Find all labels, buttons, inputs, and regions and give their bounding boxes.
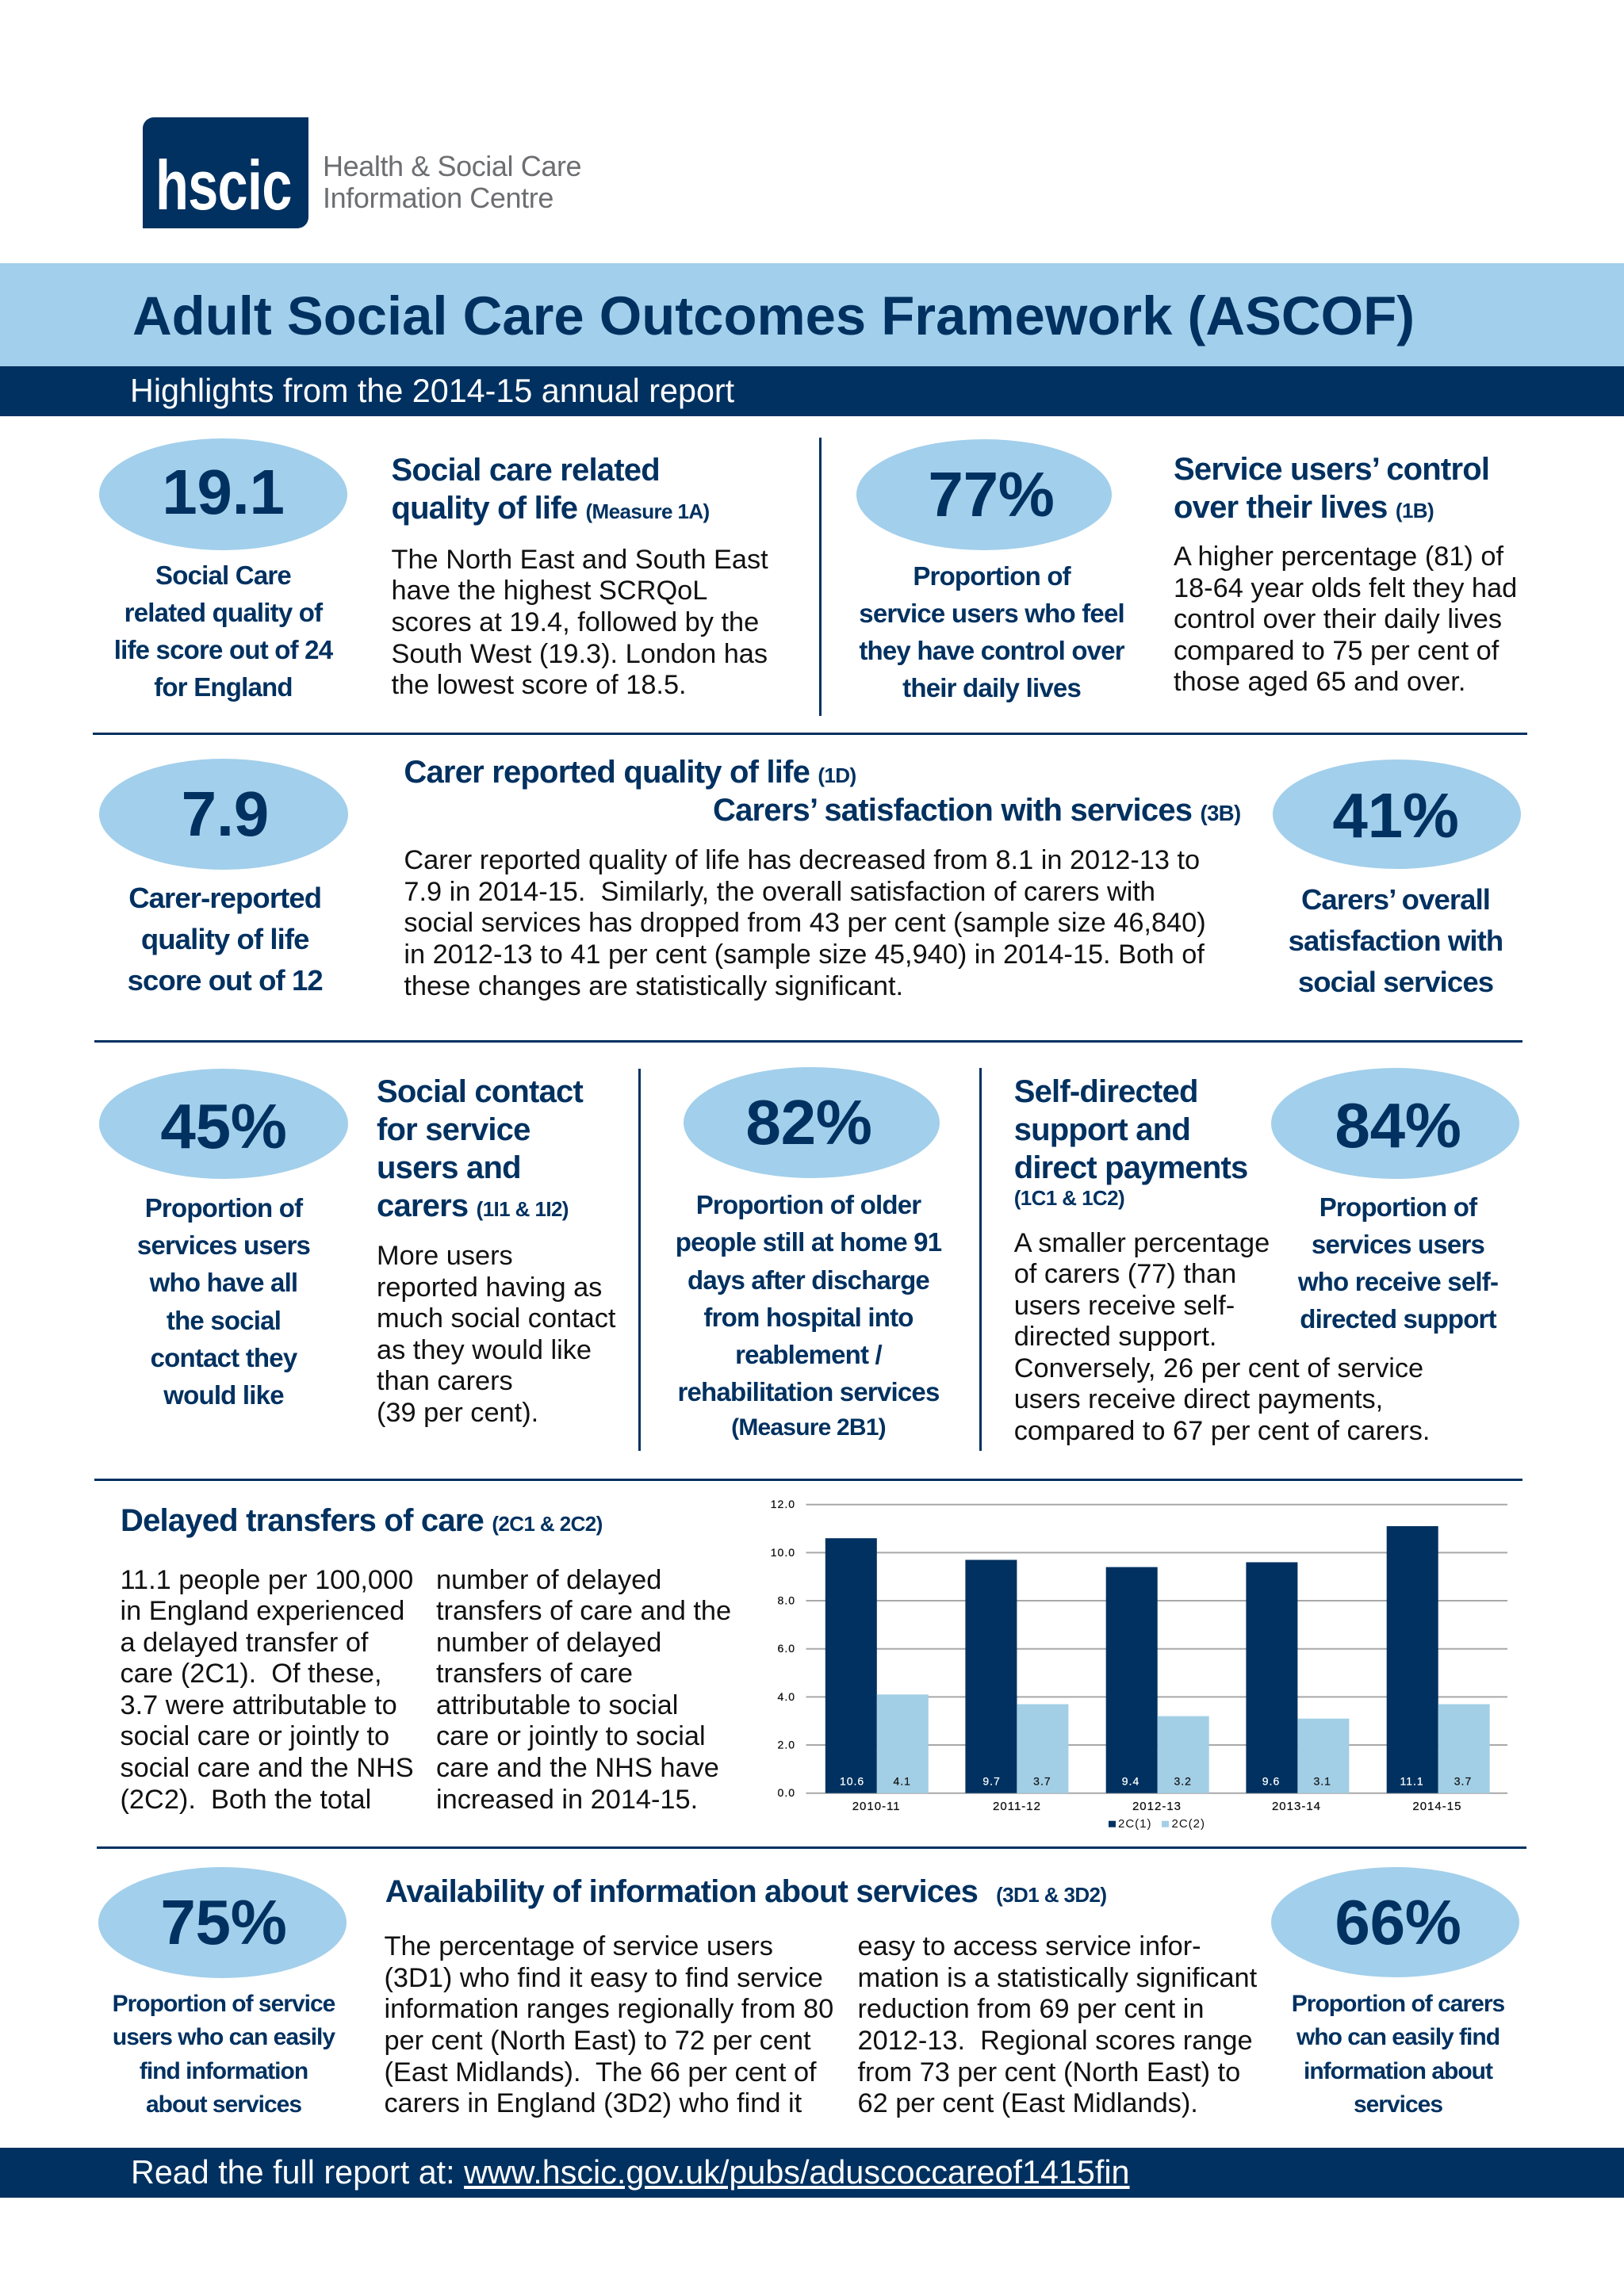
title: Adult Social Care Outcomes Framework (ASCOF)	[132, 285, 1415, 346]
heading: direct payments	[1014, 1150, 1247, 1185]
stat caption	[128, 882, 323, 997]
2C(2) value labels: 3.2	[1174, 1775, 1192, 1788]
body text: have the highest SCRQoL	[392, 576, 707, 606]
2C(2) value labels: 4.1	[893, 1775, 911, 1788]
body text: compared to 75 per cent of	[1174, 636, 1499, 666]
2C(1) value labels	[840, 1775, 1424, 1788]
y axis labels: 0.0	[778, 1786, 795, 1799]
body text: column 1: (2C2). Both the total	[121, 1785, 371, 1815]
heading: quality of life (Measure 1A)	[392, 491, 710, 526]
body text: column 2: care or jointly to social	[436, 1721, 706, 1751]
stat caption	[859, 561, 1124, 702]
body text: column 2: transfers of care	[436, 1659, 633, 1689]
heading: Self-directed	[1014, 1074, 1198, 1109]
body text	[1013, 1227, 1430, 1446]
x axis labels	[852, 1800, 1461, 1813]
body text: column 1: information ranges regionally from 80	[384, 1994, 833, 2024]
heading	[1014, 1074, 1247, 1210]
stat caption	[65, 1988, 382, 2122]
series 2C(2) bars	[877, 1694, 1490, 1793]
stat caption: who receive self-	[1298, 1267, 1498, 1296]
y axis labels	[771, 1498, 795, 1799]
stat caption: reablement /	[735, 1340, 882, 1369]
x axis labels: 2014-15	[1412, 1800, 1461, 1813]
heading	[392, 453, 710, 526]
y axis labels: 6.0	[778, 1642, 795, 1655]
stat bubble: 82%	[684, 1067, 940, 1178]
stat value: 77%	[928, 459, 1055, 530]
body text: the lowest score of 18.5.	[392, 670, 687, 700]
stat caption: Proportion of older	[696, 1190, 921, 1219]
stat value: 19.1	[162, 457, 285, 527]
stat bubble: 45%	[99, 1069, 348, 1179]
heading: (1C1 & 1C2)	[1014, 1186, 1124, 1210]
body text: column 1	[121, 1565, 414, 1816]
body text: A smaller percentage	[1014, 1227, 1270, 1257]
series 2C(1) bars	[825, 1526, 1438, 1793]
heading: for service	[377, 1112, 530, 1147]
body text: users receive direct payments,	[1014, 1384, 1383, 1414]
body text: column 1: care (2C1). Of these,	[121, 1659, 382, 1689]
y axis labels: 12.0	[771, 1498, 795, 1510]
stat caption: related quality of	[124, 598, 322, 627]
panel: availability of information about services	[95, 1859, 1522, 2133]
body text: column 2	[436, 1565, 731, 1816]
body text: social services has dropped from 43 per cent (sample size 46,840)	[404, 908, 1206, 938]
stat caption: services users	[1312, 1230, 1484, 1259]
2C(1) value labels: 9.4	[1122, 1775, 1139, 1788]
2C(2) value labels: 3.1	[1313, 1775, 1331, 1788]
stat caption: directed support	[1300, 1304, 1496, 1334]
body text: directed support.	[1014, 1322, 1216, 1352]
body text: scores at 19.4, followed by the	[392, 607, 759, 637]
2C(1) value labels: 11.1	[1400, 1775, 1424, 1788]
stat caption: find information	[140, 2058, 308, 2084]
heading: over their lives (1B)	[1174, 490, 1434, 525]
heading: Service users’ control	[1174, 452, 1489, 487]
x axis labels: 2013-14	[1272, 1800, 1321, 1813]
stat value: 82%	[745, 1087, 872, 1158]
2C(1) value labels: 10.6	[840, 1775, 864, 1788]
title band	[0, 263, 1624, 366]
body text: column 1: a delayed transfer of	[121, 1628, 368, 1658]
stat caption: satisfaction with	[1289, 924, 1503, 957]
body text: column 2: mation is a statistically significant	[858, 1963, 1257, 1993]
logo organisation name: Health & Social Care	[323, 150, 581, 182]
body text: South West (19.3). London has	[392, 639, 768, 669]
stat caption: services users	[137, 1230, 310, 1260]
stat caption: contact they	[151, 1343, 297, 1372]
stat caption	[1239, 1988, 1557, 2122]
body text: these changes are statistically significant.	[404, 971, 903, 1001]
stat value: 66%	[1335, 1887, 1461, 1957]
heading: carers (1I1 & 1I2)	[377, 1188, 569, 1223]
stat caption: for England	[154, 672, 293, 702]
stat value: 45%	[160, 1091, 287, 1161]
body text: compared to 67 per cent of carers.	[1014, 1416, 1430, 1446]
stat caption: about services	[146, 2091, 301, 2118]
heading: support and	[1014, 1112, 1190, 1147]
heading: Social care related	[392, 453, 660, 488]
body text: column 2: number of delayed	[436, 1565, 661, 1595]
y axis labels: 2.0	[778, 1738, 795, 1751]
chart legend: 2C(1)	[1118, 1817, 1152, 1831]
body text: column 1: social care or jointly to	[121, 1721, 389, 1751]
body text: 18-64 year olds felt they had	[1174, 573, 1517, 603]
stat caption	[676, 1190, 942, 1441]
stat caption	[137, 1193, 310, 1410]
heading: Social contact	[377, 1074, 583, 1109]
x axis labels: 2011-12	[993, 1800, 1041, 1813]
2C(2) value labels: 3.7	[1454, 1775, 1472, 1788]
stat caption: their daily lives	[902, 673, 1081, 702]
body text: column 2: from 73 per cent (North East) to	[858, 2057, 1240, 2087]
stat caption	[1239, 1188, 1557, 1337]
footer band	[0, 2148, 1624, 2198]
stat caption: Carers’ overall	[1301, 883, 1490, 916]
logo: hscic	[143, 117, 581, 228]
stat value: 84%	[1335, 1090, 1461, 1161]
stat caption: Proportion of	[1320, 1192, 1477, 1222]
body text: column 2	[858, 1931, 1257, 2120]
stat bubble: 19.1	[99, 438, 347, 550]
panel: service users' control over their lives	[856, 439, 1517, 702]
body text: Carer reported quality of life has decreased from 8.1 in 2012-13 to	[404, 845, 1200, 875]
stat caption: the social	[167, 1306, 281, 1335]
logo badge	[143, 117, 308, 228]
stat caption: would like	[163, 1380, 284, 1410]
panel: carer quality of life and satisfaction	[99, 755, 1521, 1001]
y axis labels: 8.0	[778, 1594, 795, 1606]
logo wordmark: hscic	[155, 146, 292, 224]
stat caption: quality of life	[141, 923, 309, 955]
body text: column 1: per cent (North East) to 72 per cent	[384, 2026, 811, 2056]
2C(2) value labels	[893, 1775, 1472, 1788]
body text: (39 per cent).	[377, 1398, 538, 1428]
stat caption: days after discharge	[688, 1265, 929, 1295]
stat caption: users who can easily	[113, 2024, 335, 2050]
body text: column 2: 62 per cent (East Midlands).	[858, 2088, 1198, 2118]
body text: column 2: easy to access service infor-	[858, 1931, 1201, 1961]
chart legend	[1109, 1817, 1205, 1831]
body text: column 1	[384, 1931, 833, 2120]
stat bubble: 84%	[1271, 1068, 1519, 1179]
body text: Conversely, 26 per cent of service	[1014, 1353, 1423, 1383]
stat bubble: 66%	[1271, 1867, 1519, 1977]
body text: in 2012-13 to 41 per cent (sample size 45,940) in 2014-15. Both of	[404, 939, 1205, 970]
body text: those aged 65 and over.	[1174, 667, 1465, 697]
stat caption: (Measure 2B1)	[731, 1414, 886, 1441]
stat bubble: 77%	[856, 439, 1112, 550]
stat caption: score out of 12	[128, 964, 323, 997]
bar chart: delayed transfers 2C(1) and 2C(2)	[761, 1490, 1522, 1839]
body text: column 1: The percentage of service users	[384, 1931, 773, 1961]
panel: self-directed support and direct payments	[1013, 1068, 1519, 1446]
heading	[377, 1074, 584, 1223]
stat caption: who have all	[150, 1268, 297, 1297]
body text: column 2: 2012-13. Regional scores range	[858, 2026, 1253, 2056]
stat caption: who can easily find	[1297, 2024, 1500, 2050]
body text: than carers	[377, 1366, 513, 1396]
stat caption: life score out of 24	[114, 635, 332, 664]
heading: Availability of information about services (3D1 & 3D2)	[385, 1874, 1106, 1909]
panel: social contact	[99, 1069, 615, 1428]
body text: column 2: attributable to social	[436, 1690, 678, 1720]
heading: Carers’ satisfaction with services (3B)	[713, 793, 1241, 828]
heading	[1174, 452, 1489, 525]
stat value: 41%	[1332, 780, 1459, 851]
stat caption	[1289, 883, 1503, 998]
body text: reported having as	[377, 1272, 602, 1303]
2C(1) value labels: 9.7	[982, 1775, 1001, 1788]
stat bubble: 75%	[98, 1867, 347, 1978]
body text: column 2: number of delayed	[436, 1628, 661, 1658]
stat caption: Social Care	[155, 561, 291, 590]
heading: Carer reported quality of life (1D)	[404, 755, 856, 790]
subtitle band	[0, 366, 1624, 416]
panel: older people still at home	[676, 1067, 942, 1441]
body text	[1174, 541, 1517, 697]
stat caption: rehabilitation services	[677, 1377, 940, 1406]
body text: column 1: 11.1 people per 100,000	[121, 1565, 413, 1595]
stat caption: people still at home 91	[676, 1227, 941, 1257]
body text: column 1: 3.7 were attributable to	[121, 1690, 397, 1720]
body text: column 1: social care and the NHS	[121, 1753, 414, 1783]
body text: column 2: care and the NHS have	[436, 1753, 719, 1783]
body text: as they would like	[377, 1335, 592, 1365]
y axis labels: 10.0	[771, 1546, 795, 1559]
stat caption: service users who feel	[859, 599, 1124, 628]
body text	[392, 545, 768, 700]
stat caption	[114, 561, 333, 702]
stat bubble: 7.9	[99, 759, 348, 870]
chart legend: 2C(2)	[1172, 1817, 1205, 1831]
heading	[404, 755, 1241, 828]
body text: much social contact	[377, 1303, 615, 1334]
panel: delayed transfers of care	[111, 1490, 1522, 1839]
stat bubble: 41%	[1273, 760, 1521, 869]
heading: Delayed transfers of care (2C1 & 2C2)	[121, 1503, 603, 1538]
stat value: 75%	[160, 1887, 287, 1957]
stat caption: Proportion of	[145, 1193, 302, 1223]
body text: A higher percentage (81) of	[1174, 541, 1503, 572]
body text: column 2: increased in 2014-15.	[436, 1785, 698, 1815]
heading: users and	[377, 1150, 521, 1185]
2C(2) value labels: 3.7	[1033, 1775, 1051, 1788]
body text: 7.9 in 2014-15. Similarly, the overall satisfaction of carers with	[404, 877, 1155, 907]
body text: column 1: carers in England (3D2) who find it	[384, 2088, 802, 2118]
stat value: 7.9	[182, 779, 269, 849]
stat caption: social services	[1298, 966, 1493, 998]
subtitle: Highlights from the 2014-15 annual report	[130, 373, 734, 409]
body text: The North East and South East	[392, 545, 768, 575]
2C(1) value labels: 9.6	[1262, 1775, 1280, 1788]
body text: column 2: reduction from 69 per cent in	[858, 1994, 1204, 2024]
stat caption: information about	[1304, 2058, 1492, 2084]
stat caption: Proportion of carers	[1292, 1991, 1504, 2017]
stat caption: services	[1354, 2091, 1442, 2118]
body text: column 1: (East Midlands). The 66 per cent of	[384, 2057, 817, 2087]
body text: column 1: in England experienced	[121, 1596, 404, 1626]
body text	[404, 845, 1206, 1001]
stat caption: Proportion of	[913, 561, 1071, 591]
body text: More users	[377, 1241, 513, 1271]
body text: of carers (77) than	[1014, 1259, 1236, 1289]
footer link text: Read the full report at: www.hscic.gov.uk/pubs/aduscoccareof1415fin	[131, 2154, 1130, 2191]
stat caption: Carer-reported	[128, 882, 321, 914]
stat caption: Proportion of service	[113, 1991, 335, 2017]
body text	[377, 1241, 615, 1428]
body text: column 1: (3D1) who find it easy to find service	[384, 1963, 823, 1993]
stat caption: from hospital into	[703, 1303, 914, 1332]
stat caption: they have control over	[859, 636, 1124, 665]
x axis labels: 2012-13	[1132, 1800, 1182, 1813]
panel: social care related quality of life	[99, 438, 768, 702]
body text: control over their daily lives	[1174, 604, 1502, 634]
y axis labels: 4.0	[778, 1690, 795, 1703]
x axis labels: 2010-11	[852, 1800, 901, 1813]
body text: column 2: transfers of care and the	[436, 1596, 731, 1626]
logo organisation name	[323, 150, 581, 214]
logo organisation name: Information Centre	[323, 181, 553, 214]
body text: users receive self-	[1014, 1291, 1235, 1321]
